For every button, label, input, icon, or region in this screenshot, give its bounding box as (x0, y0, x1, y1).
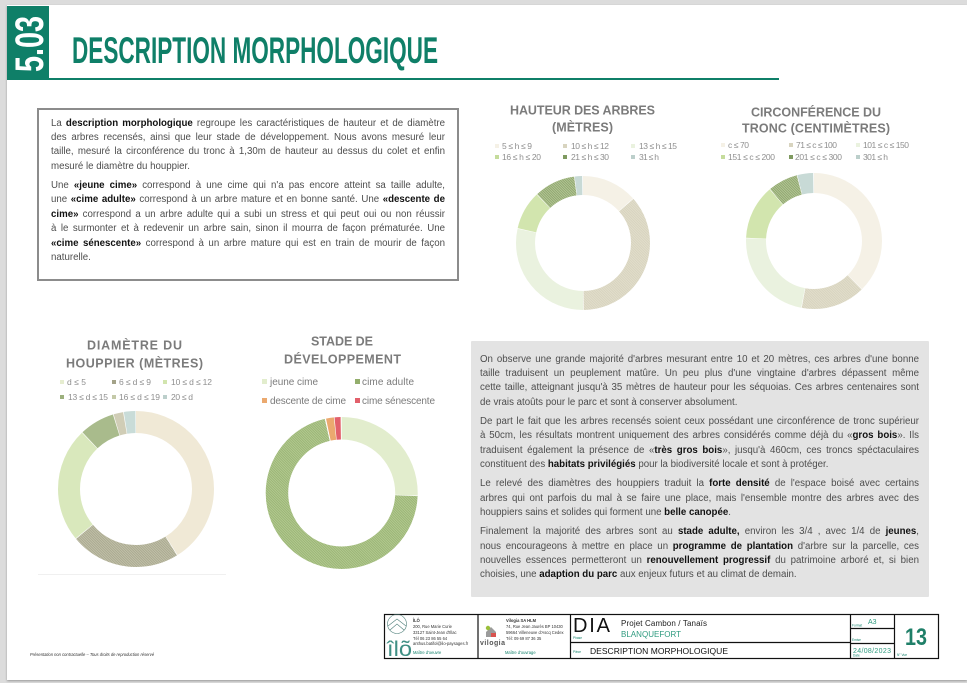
intro text panel: mesuré le diamètre du houppier. (51, 161, 190, 172)
disclaimer note: Présentation non contractuelle – Tous droits de reproduction réservé (30, 652, 154, 657)
chart title (66, 338, 203, 370)
legend: 16 ≤ d ≤ 19 (119, 392, 160, 402)
intro text panel: La description morphologique regroupe les caractéristiques de hauteur et de diamètre (51, 118, 445, 129)
format, date: A3 (868, 619, 877, 626)
legend: descente de cime (270, 396, 346, 407)
phase: DIA (573, 615, 611, 637)
title: DESCRIPTION MORPHOLOGIQUE (72, 30, 438, 71)
chart title: TRONC (CENTIMÈTRES) (742, 120, 890, 136)
legend: 5 ≤ h ≤ 9 (502, 141, 532, 151)
contact: vilogia: 74, Rue Jean Jaurès BP 10430 (506, 624, 564, 629)
analysis text panel: arbres qui ont parfois du mal à se faire une place, mais l'ensemble montre des arbres avec des (480, 493, 919, 504)
chart title: DÉVELOPPEMENT (284, 352, 401, 366)
analysis text panel: nous encourageons à mettre en place un programme de plantation d'arbre sur la parcelle, ces (480, 541, 919, 552)
legend: 20 ≤ d (171, 392, 193, 402)
intro text panel (37, 108, 459, 281)
chart title: HAUTEUR DES ARBRES (510, 104, 655, 118)
analysis text panel: On observe une grande majorité d'arbres mesurant entre 10 et 20 mètres, ces arbres d'une bonne (480, 354, 919, 365)
format, date (852, 619, 891, 658)
contact: ilo (412, 618, 469, 655)
legend: c ≤ 70 (728, 140, 749, 150)
logo: vilogia (480, 626, 505, 647)
piece: DESCRIPTION MORPHOLOGIQUE (590, 646, 728, 656)
analysis text panel: à 50cm, les résultats montrent uniquement des arbres considérés comme déjà du «gros bois». Ils (480, 430, 919, 441)
analysis text panel: traduisent également la présence de «très gros bois», jusqu'à 460cm, ces troncs spéctaculaires (480, 445, 919, 456)
sheet number (897, 624, 927, 657)
analysis text panel: constituent des habitats privilégiés pour la biodiversité locale et sont à protéger. (480, 459, 828, 470)
chart title (742, 104, 890, 136)
analysis text panel: cette taille, atteignant jusqu'à 35 mètres de hauteur pour les séquoias. Ces arbres centenaires sont (480, 382, 919, 393)
analysis text panel: Finalement la majorité des arbres sont au stade adulte, environ les 3/4 , avec 1/4 de jeunes, (480, 526, 919, 537)
chart title: STADE DE (311, 334, 373, 348)
chart title: HOUPPIER (MÈTRES) (66, 356, 203, 370)
legend: 101 ≤ c ≤ 150 (863, 140, 909, 150)
contact: vilogia: Maître d'ouvrage (505, 650, 536, 655)
intro text panel: des arbres recensés, ainsi que leur stade de développement. Nous avons mesuré leur (51, 132, 445, 143)
intro text panel: à le surmonter et à redevenir un arbre sain, sinon il mourra de façon prématurée. Une (51, 223, 445, 234)
legend (495, 141, 677, 162)
legend: 31 ≤ h (639, 152, 659, 162)
analysis text panel: choisies, une adaption du parc aux enjeux futurs et au climat de demain. (480, 569, 797, 580)
analysis text panel (471, 341, 929, 597)
legend: cime adulte (362, 377, 414, 388)
legend: 21 ≤ h ≤ 30 (571, 152, 609, 162)
sheet number: 13 (905, 624, 927, 651)
legend: 10 ≤ d ≤ 12 (171, 377, 212, 387)
contact: ilo: 33127 Saint-Jean d'Illac (413, 630, 457, 635)
chart title (510, 104, 655, 134)
legend: 71 ≤ c ≤ 100 (796, 140, 837, 150)
legend: 13 ≤ d ≤ 15 (68, 392, 108, 402)
legend: d ≤ 5 (67, 377, 86, 387)
intro text panel: «cime sénescente» correspond à un arbre mature qui est en train de mourir de façon (51, 238, 445, 249)
contact: vilogia: 59664 Villeneuve d'Ascq Cedex (506, 630, 564, 635)
donut (526, 186, 640, 300)
format, date: Format (852, 624, 862, 628)
project (621, 619, 707, 639)
legend: 13 ≤ h ≤ 15 (639, 141, 677, 151)
legend (262, 377, 435, 407)
contact: vilogia: Vilogia SA HLM (506, 618, 537, 623)
chart title: CIRCONFÉRENCE DU (751, 104, 881, 120)
chart title: (MÈTRES) (552, 120, 613, 134)
legend: cime sénescente (362, 396, 435, 407)
contact: vilogia (505, 618, 564, 655)
analysis text panel: De part le fait que les arbres recensés soient ceux possédant une circonférence de tronc supérieur (480, 416, 919, 427)
legend (60, 377, 212, 402)
contact: ilo: anthus.batifol@ilo-paysages.fr (413, 641, 469, 646)
analysis text panel: houppiers sains et solides qui forment une belle canopée. (480, 507, 731, 518)
analysis text panel: nouvelles essences permetteront un renouvellement progressif du patrimoine arboré et, si bien (480, 555, 919, 566)
logo: ilo: îlõ (386, 638, 412, 661)
donut (277, 428, 406, 558)
chart: hauteur des arbres (495, 104, 677, 300)
intro text panel: une «cime adulte» correspond à un arbre mature et en bonne santé. Une «descente de (51, 194, 445, 205)
contact: vilogia: Tél: 09 69 87 36 35 (506, 636, 542, 641)
intro text panel: cime» correspond a un arbre adulte qui a subi un stress et qui peut oui ou non réussir (51, 209, 445, 220)
intro text panel: naturelle. (51, 252, 91, 263)
legend: 6 ≤ d ≤ 9 (119, 377, 151, 387)
logo: vilogia: vilogia (480, 640, 505, 647)
legend: 201 ≤ c ≤ 300 (795, 152, 842, 162)
chart: diametre du houppier (60, 338, 212, 556)
sheet number: N° Vue (897, 653, 907, 657)
title block (384, 614, 938, 661)
phase: Phase (573, 636, 582, 640)
analysis text panel: Le relevé des diamètres des houppiers traduit la forte densité de l'espace boisé avec certains (480, 478, 919, 489)
format, date: Emise (852, 638, 861, 642)
legend: 16 ≤ h ≤ 20 (502, 152, 541, 162)
project: Projet Cambon / Tanaïs (621, 619, 707, 628)
format, date: 24/08/2023 (853, 648, 891, 655)
chart: circonference du tronc (721, 104, 909, 299)
format, date: Date (853, 654, 860, 658)
header rule (7, 78, 779, 80)
chart: stade de developpement (262, 334, 435, 558)
contact: ilo: Maître d'oeuvre (413, 650, 442, 655)
chart title: DIAMÈTRE DU (87, 338, 182, 352)
donut (756, 183, 872, 299)
intro text panel: taille, mesuré la circonférence du tronc à 1,30m de hauteur au dessus du colet et enfin (51, 146, 445, 157)
legend: jeune cime (269, 377, 318, 388)
contact: ilo: 200, Rue Marie Curie (413, 624, 453, 629)
project: BLANQUEFORT (621, 630, 681, 639)
piece: Pièce (573, 650, 581, 654)
contact: ilo: ÎLÔ (412, 618, 421, 623)
chart title (284, 334, 401, 366)
intro text panel: Une «jeune cime» correspond à une cime qui n'a pas encore atteint sa taille adulte, (51, 180, 445, 191)
legend (721, 140, 909, 162)
analysis text panel: taille traduisent un peuplement matûre. Un peu plus d'une vingtaine d'arbres dépassent même (480, 368, 919, 379)
donut (69, 422, 203, 556)
contact: ilo: Tél 06 23 86 55 64 (413, 636, 448, 641)
legend: 10 ≤ h ≤ 12 (571, 141, 609, 151)
analysis text panel: de vrais atoûts pour le parc et sont à conserver absolument. (480, 397, 737, 408)
logo: ilo (386, 614, 412, 661)
legend: 301 ≤ h (863, 152, 888, 162)
legend: 151 ≤ c ≤ 200 (728, 152, 775, 162)
